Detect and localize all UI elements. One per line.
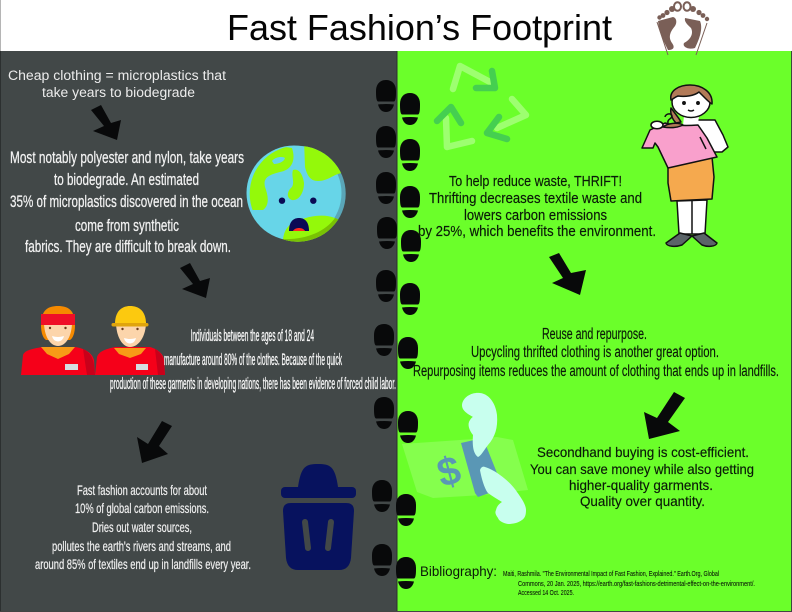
arrow: down left 5	[644, 392, 685, 439]
worker with red headband	[21, 306, 95, 375]
text: thrift advice: lowers carbon emissions	[464, 208, 607, 224]
text: reuse and repurpose: Reuse and repurpose.	[542, 326, 647, 343]
text: secondhand buying	[530, 444, 754, 509]
icon: two factory workers	[21, 306, 165, 375]
text: citation: Accessed 14 Oct. 2025.	[518, 588, 574, 597]
text: thrift advice: To help reduce waste, THRIFT!	[449, 174, 622, 190]
arrow: down left 3	[137, 421, 172, 463]
head	[672, 86, 710, 118]
text: carbon emissions: Dries out water sources,	[92, 519, 192, 535]
hanger hook	[665, 114, 672, 123]
ponytail	[671, 108, 681, 123]
text: carbon emissions: around 85% of textiles end up in landfills every year.	[35, 556, 251, 572]
text: secondhand buying: Secondhand buying is cost-efficient.	[537, 444, 749, 460]
text: polyester and nylon: come from synthetic	[75, 216, 179, 235]
text: microplastics headline: take years to biodegrade	[42, 85, 195, 100]
text: thrift advice: by 25%, which benefits the environment.	[418, 224, 656, 240]
text: thrift advice: Thrifting decreases textile waste and	[429, 191, 642, 207]
title: Fast Fashion’s Footprint	[227, 7, 612, 48]
legs	[677, 200, 707, 234]
hanger	[663, 123, 683, 128]
white blouse	[684, 120, 728, 152]
text: carbon emissions	[35, 482, 251, 572]
hair	[671, 85, 712, 104]
hand	[651, 121, 663, 129]
text: carbon emissions: Fast fashion accounts for about	[77, 482, 207, 498]
shirt	[642, 123, 717, 168]
shoes	[666, 233, 717, 246]
text: polyester and nylon: Most notably polyester and nylon, take years	[10, 148, 244, 167]
text: citation	[503, 569, 755, 597]
text: polyester and nylon	[10, 148, 244, 256]
arrow: down right 1	[91, 105, 121, 140]
icon: recycling arrows	[437, 66, 526, 147]
text: thrift advice	[418, 174, 656, 240]
text: secondhand buying: higher-quality garments.	[569, 477, 713, 493]
text: polyester and nylon: 35% of microplastics discovered in the ocean	[10, 192, 243, 211]
icon: trash can	[281, 464, 356, 570]
icon: worried earth	[246, 146, 346, 242]
text: reuse and repurpose	[413, 326, 779, 380]
icon: hands exchanging money	[402, 393, 528, 524]
text: polyester and nylon: fabrics. They are difficult to break down.	[25, 237, 231, 256]
icon: brown bare footprints	[657, 2, 709, 55]
arrow: down right 2	[180, 263, 210, 298]
text: carbon emissions: 10% of global carbon emissions.	[75, 500, 209, 516]
text: polyester and nylon: to biodegrade. An estimated	[54, 170, 199, 189]
footprint trail: left steps	[372, 80, 397, 576]
arrow: down right 4	[549, 253, 586, 295]
heading: bibliography: Bibliography:	[420, 563, 497, 579]
text: secondhand buying: You can save money while also getting	[530, 461, 754, 477]
text: secondhand buying: Quality over quantity.	[580, 493, 705, 509]
text: microplastics headline: Cheap clothing = microplastics that	[8, 68, 226, 83]
illustration: woman holding shirt	[642, 85, 728, 246]
icon: hands exchanging money: $	[433, 448, 465, 496]
infographic canvas: manufacture around 80% of the clothes. Because of the quick	[164, 350, 342, 369]
text: child labor	[110, 326, 396, 393]
skirt	[668, 157, 714, 201]
text: carbon emissions: pollutes the earth's rivers and streams, and	[52, 538, 231, 554]
panel: problem side	[0, 51, 397, 612]
panel: solution side	[397, 51, 792, 612]
neck	[683, 116, 699, 125]
text: microplastics headline	[8, 68, 226, 100]
footprint trail: right steps	[396, 93, 421, 589]
text: child labor: Individuals between the ages of 18 and 24	[190, 326, 314, 345]
worker with yellow hard hat	[95, 306, 165, 375]
